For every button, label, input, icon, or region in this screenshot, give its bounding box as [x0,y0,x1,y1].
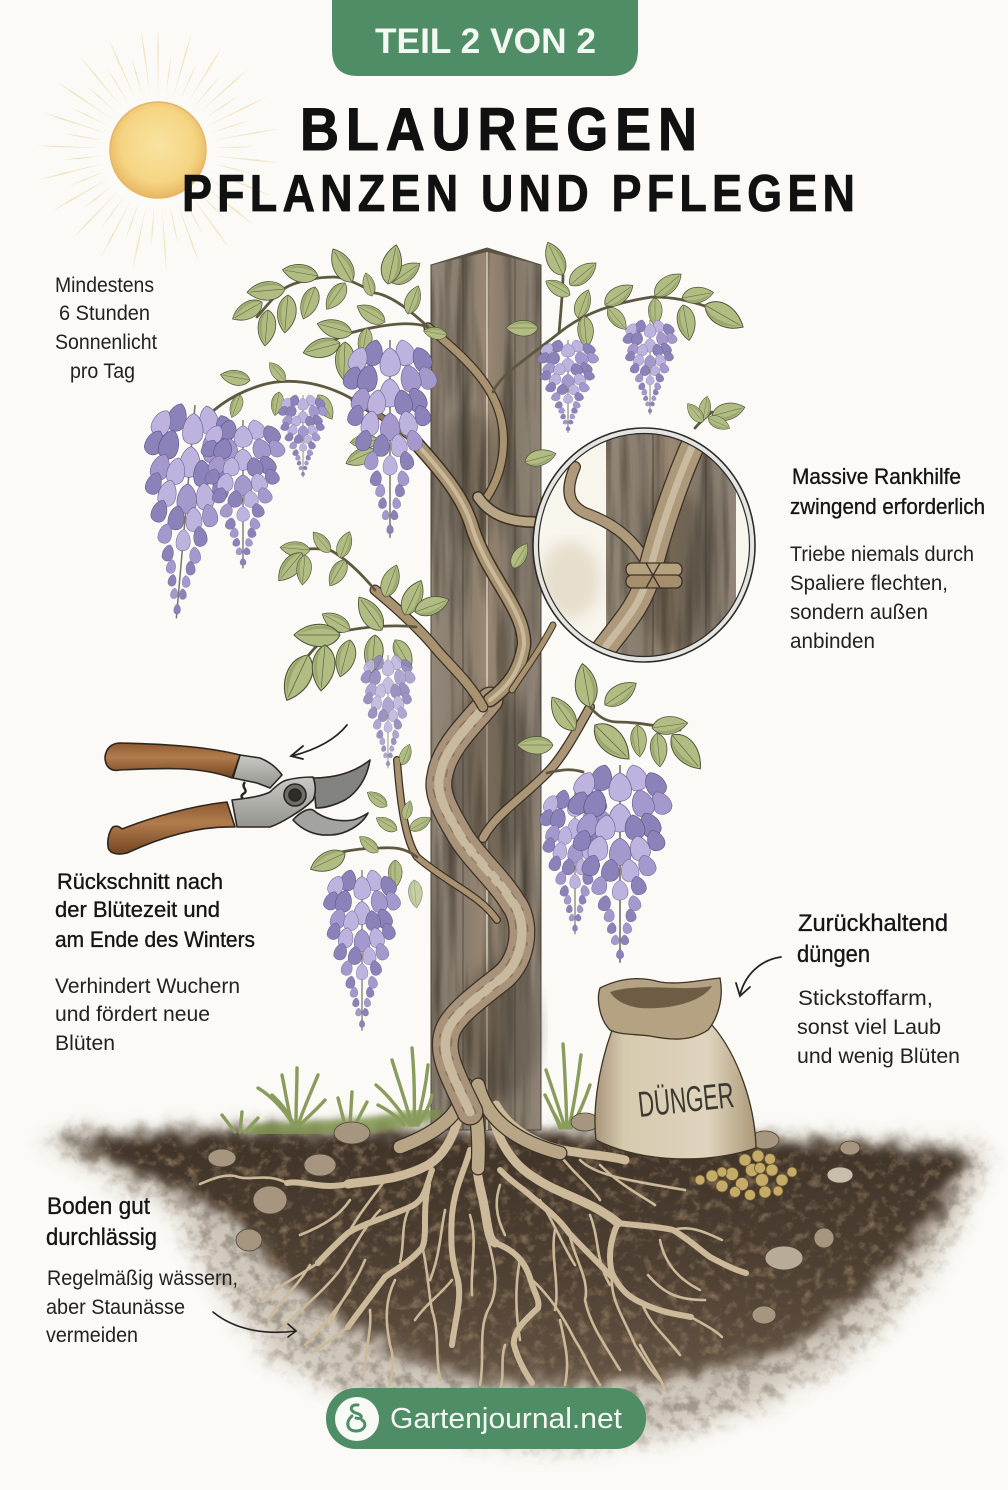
arrow: to soil [213,1312,296,1337]
text: fertilizing [797,910,960,1068]
text: pruning: Blüten [55,1032,115,1055]
title: PFLANZEN UND PFLEGEN [182,165,855,223]
inset circle: tied shoot [533,425,755,665]
text: pruning [55,869,255,1055]
fertilizer pellets [695,1150,797,1200]
text: trellis support: Massive Rankhilfe [792,464,961,489]
knot [626,563,682,588]
footer label: Gartenjournal.net [390,1403,622,1435]
text: soil: vermeiden [46,1324,138,1347]
text: fertilizing: sonst viel Laub [797,1016,941,1039]
text: pruning: am Ende des Winters [55,927,255,952]
title: BLAUREGEN [300,96,697,164]
icon: logo [335,1397,379,1441]
text: fertilizing: düngen [797,941,870,968]
wisteria flowers [127,319,679,1031]
stones [208,1113,860,1324]
text: pruning: der Blütezeit und [55,897,220,922]
text: soil: durchlässig [46,1224,157,1251]
vine stems [195,275,712,1168]
text: trellis support: Triebe niemals durch [790,543,974,566]
text: trellis support: Spaliere flechten, [790,572,948,595]
text: soil: Regelmäßig wässern, [47,1267,238,1290]
grass [222,1044,590,1132]
icon: sun [36,28,279,272]
leaves [219,239,749,908]
footer badge [326,1388,646,1449]
arrow: to fertilizer bag [736,957,781,996]
text: soil [46,1193,238,1347]
top banner [332,0,638,76]
text: trellis support: zwingend erforderlich [790,494,985,519]
text: trellis support: anbinden [790,630,875,653]
text: fertilizing: Zurückhaltend [798,910,948,937]
fine branches [195,275,712,857]
text: soil: aber Staunässe [46,1296,185,1319]
text: trellis support [790,464,985,653]
moss [255,1112,432,1132]
text: sunlight [55,274,157,383]
text: pruning: und fördert neue [55,1003,210,1026]
text: sunlight: 6 Stunden [59,302,150,325]
text: soil: Boden gut [47,1193,150,1220]
bag label: DÜNGER [636,1074,736,1125]
fertilizer bag [595,978,756,1159]
post [431,248,541,1130]
text: trellis support: sondern außen [790,601,928,624]
icon: pruning shears [105,743,370,854]
title [182,96,855,223]
text: pruning: Verhindert Wuchern [55,975,240,998]
banner label: TEIL 2 VON 2 [375,22,596,61]
roots [200,1105,746,1390]
arrow: to shears [291,725,347,759]
text: fertilizing: Stickstoffarm, [798,987,933,1010]
soil [40,1131,985,1445]
text: sunlight: Mindestens [55,274,154,297]
text: fertilizing: und wenig Blüten [797,1045,960,1068]
text: pruning: Rückschnitt nach [57,869,223,894]
text: sunlight: Sonnenlicht [55,331,157,354]
text: sunlight: pro Tag [70,360,135,383]
